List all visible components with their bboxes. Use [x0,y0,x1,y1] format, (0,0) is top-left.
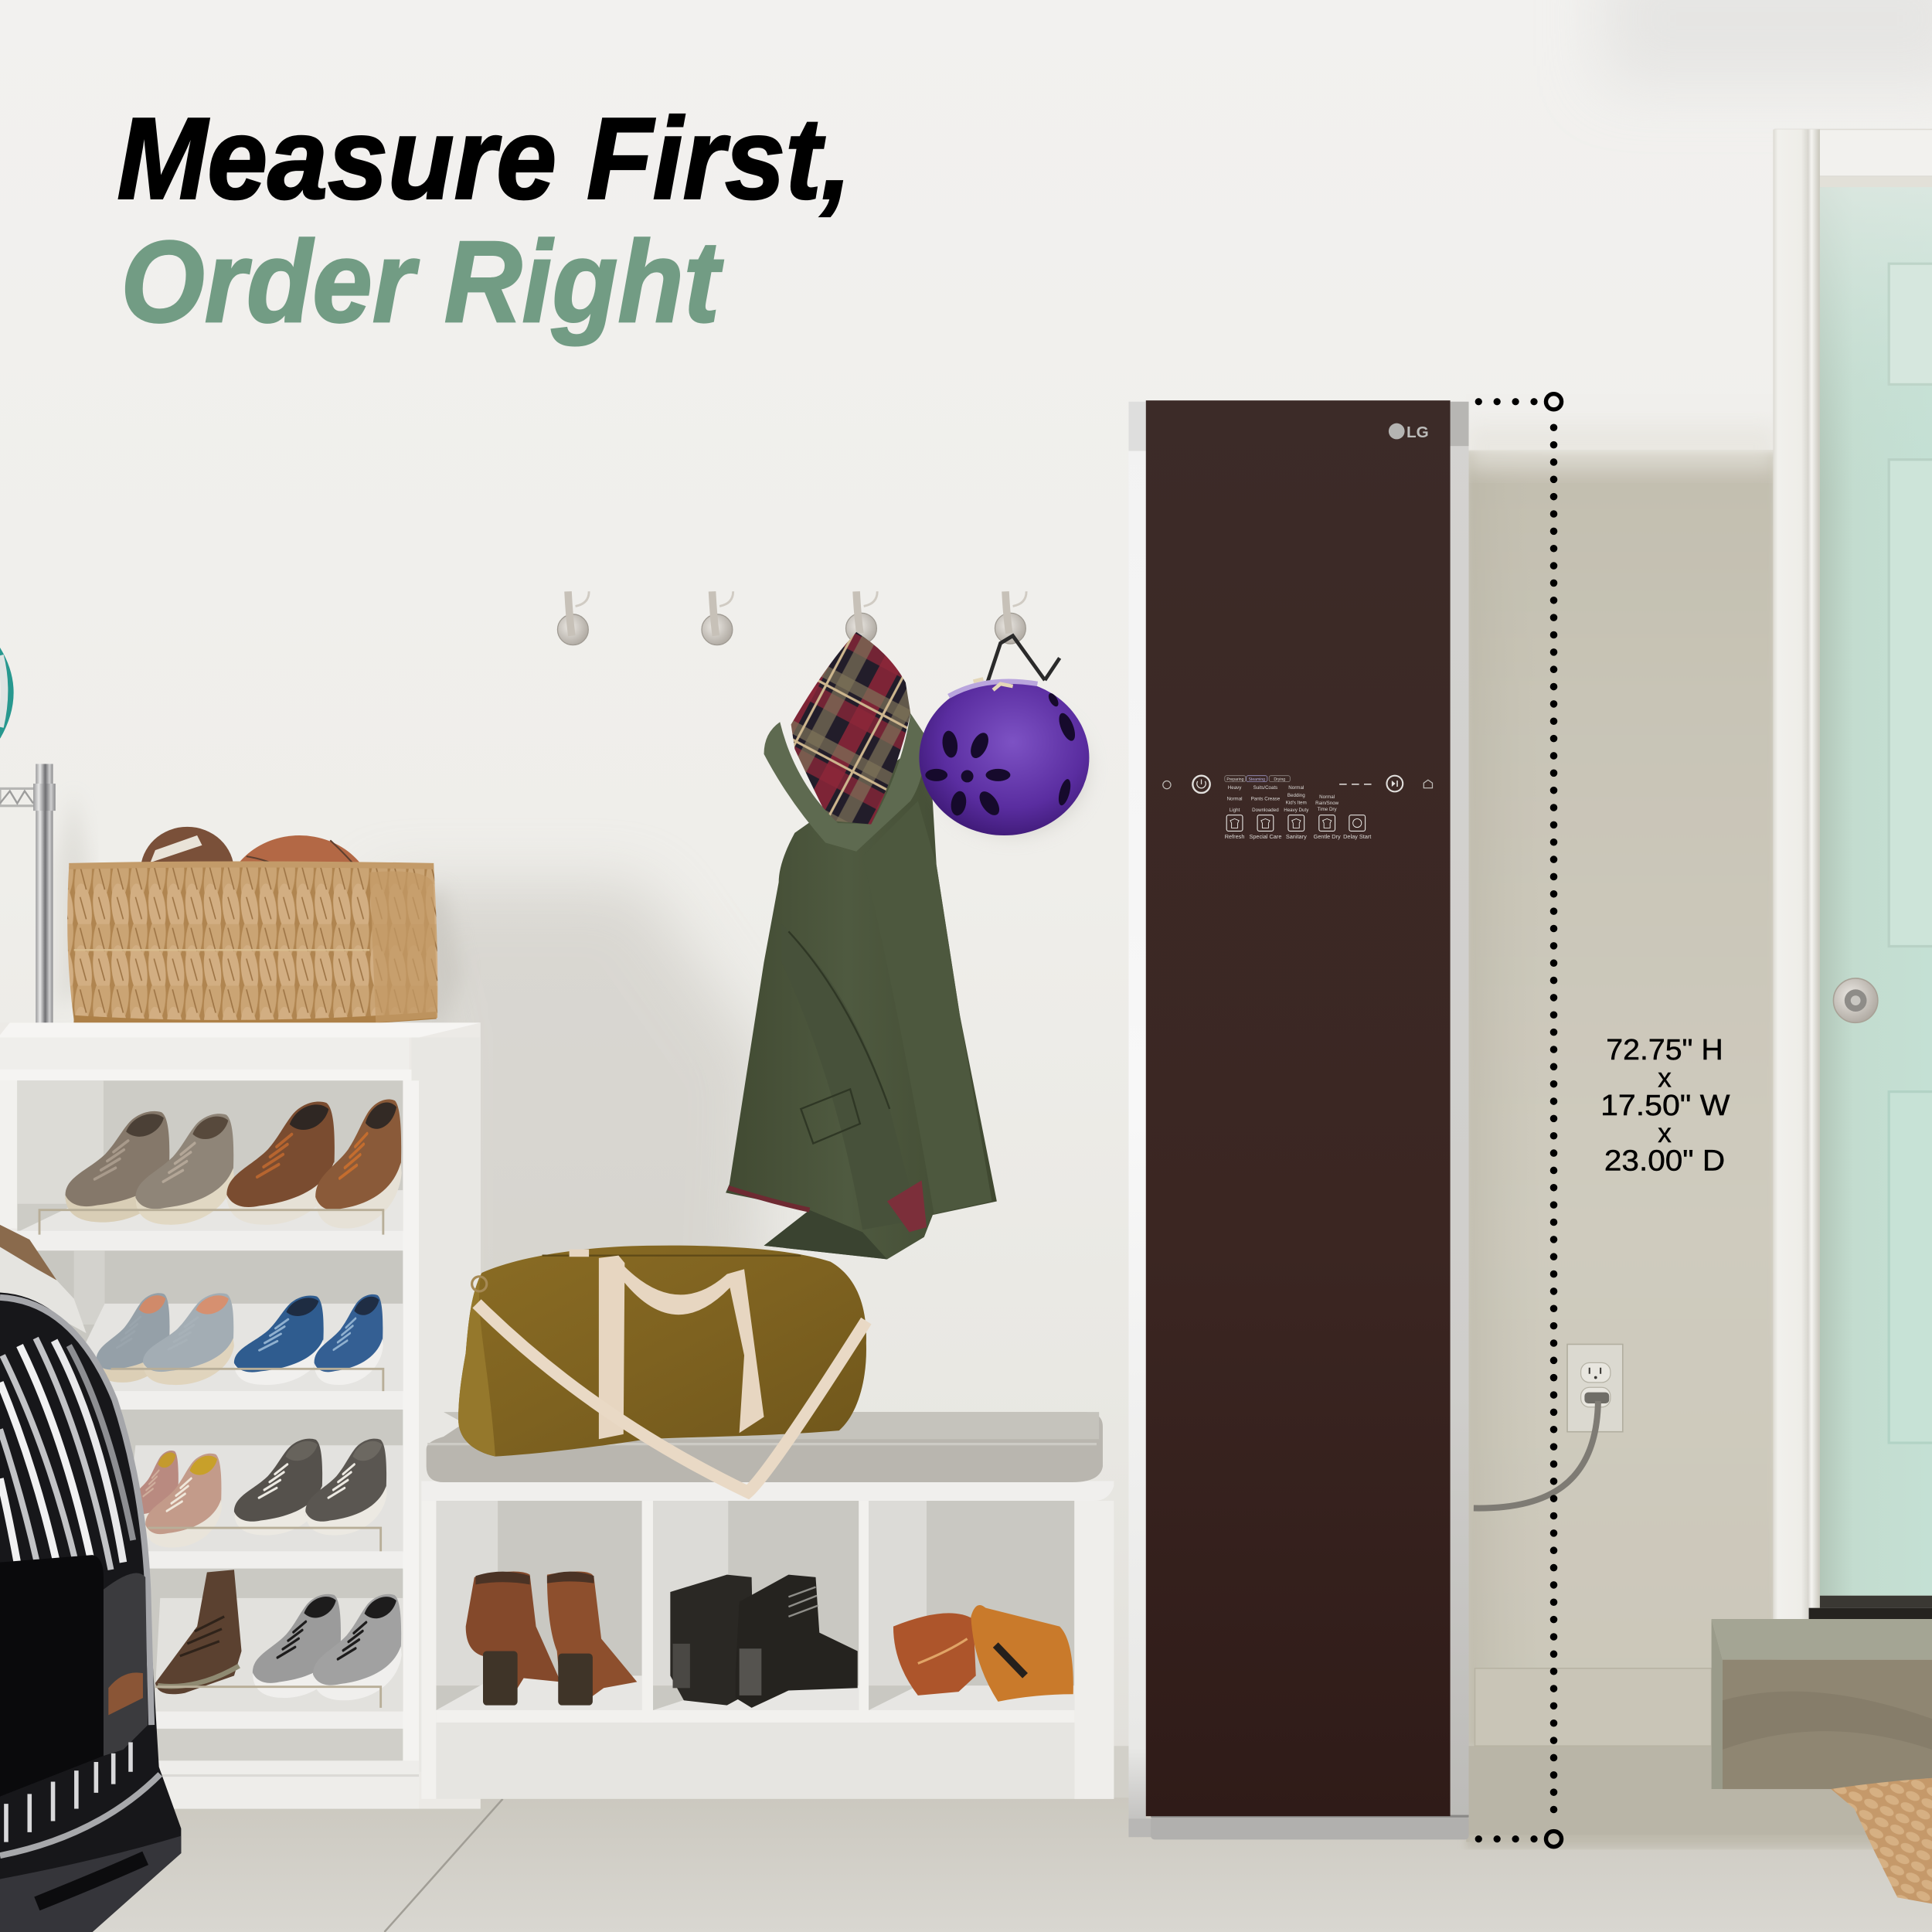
steamer appliance [1128,400,1469,1839]
baseball gloves [893,1605,1073,1702]
left cubby [436,1501,642,1710]
power cord [1474,1401,1598,1509]
floral canvas shoes [129,1451,222,1548]
Sanitary column: Bedding [1287,793,1305,798]
steamer door [1146,400,1451,1816]
bag handle straps [570,1250,764,1439]
shoe rack wires [39,1210,383,1708]
time display dashes [1339,784,1372,785]
Sanitary column [1284,785,1309,840]
left smart icon [1163,781,1171,789]
power outlet [1567,1344,1623,1432]
Special Care column: Downloaded [1252,808,1279,813]
football [141,827,234,916]
wall hook 4 [995,591,1026,644]
chrome side reflections [104,1573,148,1756]
Special Care column: Special Care [1249,833,1281,840]
Refresh column: Normal [1227,797,1243,802]
basketball [223,835,376,976]
vertical dotted line [1552,427,1556,1815]
title: Order Right [121,216,724,346]
steamer base [1128,1815,1469,1839]
wall hook 3 [846,591,877,644]
green coat [726,632,997,1259]
shoe shelf unit [0,1022,481,1809]
right side panel [412,1037,481,1772]
wicker and white object on car hood [0,1225,87,1333]
power button [1192,776,1210,793]
row 2 interior [17,1250,403,1393]
dimensions text [1600,1033,1730,1178]
purple helmet [919,636,1089,835]
dimensions text: 72.75" H [1606,1033,1723,1066]
car body [0,1293,181,1932]
baseboard right of steamer [1475,1668,1712,1746]
steamer left side [1128,402,1146,1818]
cycle stage labels: Drying [1274,777,1285,782]
LG logo: LG [1406,423,1429,441]
duffel bag [458,1246,866,1492]
home icon [1423,780,1432,788]
dimensions text: x [1658,1118,1672,1148]
title: Measure First, [117,94,852,223]
wall hook 1 [557,591,589,645]
racket on wall [0,645,11,736]
Sanitary column: Sanitary [1286,833,1307,840]
right cubby [869,1501,1074,1710]
concrete step [1712,1619,1932,1789]
Refresh column: Light [1230,808,1240,813]
shoulder strap [477,1304,866,1492]
car front [0,1225,181,1932]
Special Care column: Suits/Coats [1253,785,1277,791]
title [117,94,852,346]
steamer right side [1451,402,1469,1818]
door threshold [1809,1596,1932,1624]
Sanitary column: Heavy Duty [1284,808,1309,813]
left side post [0,1080,17,1229]
Gentle Dry column: Time Dry [1318,807,1338,812]
chrome lower bar [0,1774,160,1855]
shadowed wall right of the steamer [1466,394,1777,1747]
row 1 interior [17,1080,403,1232]
wall shadow behind basket and bench [369,883,764,1405]
Gentle Dry column: Normal [1319,794,1335,800]
middle cubby [653,1501,859,1710]
door mat [1831,1778,1932,1903]
brown high-top [155,1570,241,1694]
dark sneakers [234,1439,387,1536]
grille slats [0,1338,133,1572]
wire rack and pole [0,764,89,1026]
brown boat shoes [226,1099,402,1229]
bottom ring marker [1546,1832,1562,1847]
cycle stage labels: Preparing [1226,777,1244,782]
row 3 interior [111,1410,403,1553]
chrome grille surround [0,1298,151,1725]
top ring marker [1546,394,1562,410]
top horizontal dots [1475,398,1538,405]
base gap [154,1729,403,1760]
coat body [726,740,997,1259]
hood rim [764,713,925,852]
grey skate sneakers [253,1594,402,1700]
helmet vents [925,692,1078,818]
grey lace shoes [66,1111,234,1225]
door [1820,187,1932,1596]
Gentle Dry column: Gentle Dry [1314,833,1341,840]
door upper panel [1889,264,1932,384]
dimensions text: x [1658,1063,1672,1093]
control panel [1163,776,1432,840]
Delay Start column [1343,815,1371,840]
bottom horizontal dots [1475,1835,1538,1842]
Refresh column: Heavy [1228,785,1242,791]
Special Care column [1249,785,1281,840]
coral slip-on shoes [96,1293,234,1385]
Refresh column [1225,785,1244,840]
Special Care column: Pants Crease [1251,797,1281,802]
cycle stage labels: Steaming [1249,777,1265,782]
start button [1386,776,1403,791]
Gentle Dry column [1314,794,1341,840]
Sanitary column: Normal [1288,785,1304,791]
door lower panel [1889,1092,1932,1443]
wicker basket [67,864,462,1029]
bench [421,1412,1114,1799]
wall hook 2 [702,591,733,645]
Sanitary column: Kid's Item [1286,800,1307,805]
seat cushion [427,1412,1103,1482]
brown ankle boots [466,1572,637,1706]
dimensions text: 23.00" D [1604,1145,1725,1178]
Refresh column: Refresh [1225,833,1244,840]
height dimension dots [1475,394,1562,1847]
row 4 interior [135,1569,403,1712]
lower grille slats [6,1742,131,1842]
blue polka dot shoes [234,1294,383,1385]
plaid hood lining [791,632,910,825]
floor [0,1746,1932,1932]
Gentle Dry column: Rain/Snow [1315,801,1339,806]
licence plate panel [0,1555,104,1797]
bench top [421,1481,1114,1501]
shelf top [0,1022,481,1037]
Delay Start column: Delay Start [1343,833,1371,840]
LG logo [1389,423,1429,441]
grey shading at top right of wall [1602,0,1932,87]
cycle stage labels [1225,776,1290,782]
door middle panel [1889,460,1932,946]
black cleats [670,1575,858,1708]
deadbolt [1833,978,1878,1022]
door trim [1773,129,1932,1621]
dimensions text: 17.50" W [1600,1089,1730,1122]
